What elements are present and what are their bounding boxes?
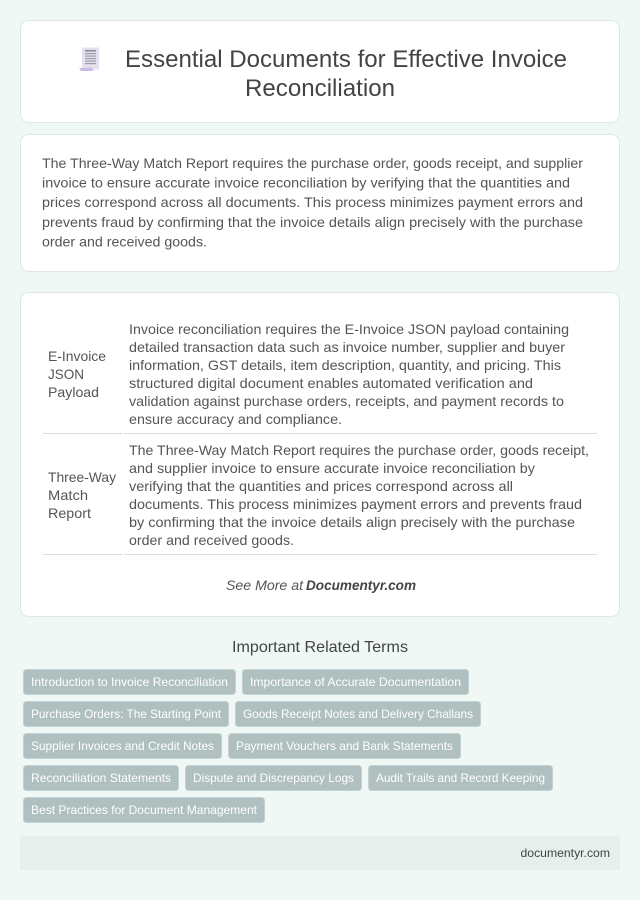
tag: Goods Receipt Notes and Delivery Challans [243, 707, 473, 721]
row description: Three-Way Match Report: order and received goods. [129, 532, 294, 548]
row description: Three-Way Match Report: and supplier invoice to ensure accurate invoice reconciliation by [129, 460, 535, 476]
tag: Audit Trails and Record Keeping [376, 771, 545, 785]
tag: Payment Vouchers and Bank Statements [236, 739, 453, 753]
row description: Three-Way Match Report: by confirming that the invoice details align precisely with the purchase [129, 514, 575, 530]
title: Essential Documents for Effective Invoice [125, 46, 567, 73]
row description: E-Invoice JSON Payload: structured digital document enables automated verification and [129, 375, 533, 391]
see more link: Documentyr.com [306, 577, 416, 593]
title: Reconciliation [245, 75, 395, 102]
see more link [226, 577, 416, 593]
heading: important related terms: Important Related Terms [232, 639, 408, 656]
tag: Introduction to Invoice Reconciliation [31, 675, 228, 689]
row label: E-Invoice JSON Payload: Payload [48, 384, 99, 400]
row description: Three-Way Match Report [129, 442, 589, 548]
row label: Three-Way Match Report: Report [48, 505, 91, 521]
footer: documentyr.com [520, 846, 610, 860]
footer [20, 836, 620, 870]
text block: summary: prevents fraud by confirming that the invoice details align precisely with the purchase [42, 214, 583, 230]
tag [24, 798, 264, 822]
row description: Three-Way Match Report: documents. This process minimizes payment errors and prevents fraud [129, 496, 582, 512]
row description: Three-Way Match Report: The Three-Way Match Report requires the purchase order, goods receipt, [129, 442, 589, 458]
row description: E-Invoice JSON Payload: validation against purchase orders, receipts, and payment records to [129, 393, 564, 409]
row label: E-Invoice JSON Payload: E-Invoice [48, 348, 106, 364]
tag [368, 766, 552, 790]
tag: Importance of Accurate Documentation [250, 675, 461, 689]
row label: Three-Way Match Report: Match [48, 487, 88, 503]
text block: summary: prices correspond across all documents. This process minimizes payment errors and [42, 194, 583, 210]
row: E-Invoice JSON Payload [43, 321, 597, 434]
tag [24, 734, 222, 758]
row label: Three-Way Match Report [48, 469, 116, 521]
tag: Dispute and Discrepancy Logs [193, 771, 354, 785]
tag: Supplier Invoices and Credit Notes [31, 739, 214, 753]
tag [242, 670, 468, 694]
tag: Reconciliation Statements [31, 771, 171, 785]
row description: E-Invoice JSON Payload: information, GST details, item description, quantity, and pricing. This [129, 357, 561, 373]
panel: header [20, 20, 620, 122]
icon: document scroll [80, 48, 99, 71]
row description: E-Invoice JSON Payload: detailed transaction data such as invoice number, supplier and buyer [129, 339, 565, 355]
text block: summary: invoice to ensure accurate invoice reconciliation by verifying that the quantities and [42, 175, 570, 191]
text block: summary [42, 155, 583, 249]
panel: related term tags [24, 670, 552, 822]
row description: E-Invoice JSON Payload: ensure accuracy and compliance. [129, 411, 342, 427]
text block: summary: order and received goods. [42, 233, 207, 249]
tag: Purchase Orders: The Starting Point [31, 707, 222, 721]
tag [24, 766, 178, 790]
row description: E-Invoice JSON Payload [129, 321, 569, 427]
row label: Three-Way Match Report: Three-Way [48, 469, 116, 485]
tag [186, 766, 362, 790]
see more link: See More at [226, 577, 304, 593]
tag [24, 702, 228, 726]
tag [236, 702, 480, 726]
row description: E-Invoice JSON Payload: Invoice reconciliation requires the E-Invoice JSON payload containing [129, 321, 569, 337]
row label: E-Invoice JSON Payload: JSON [48, 366, 84, 382]
text block: summary: The Three-Way Match Report requires the purchase order, goods receipt, and supplier [42, 155, 583, 171]
tag [228, 734, 460, 758]
row: Three-Way Match Report [43, 442, 597, 555]
tag: Best Practices for Document Management [31, 803, 258, 817]
title [125, 46, 567, 102]
row description: Three-Way Match Report: verifying that the quantities and prices correspond across all [129, 478, 513, 494]
panel: summary paragraph [20, 134, 620, 272]
row label: E-Invoice JSON Payload [48, 348, 106, 400]
tag [24, 670, 236, 694]
panel: document table [20, 292, 620, 616]
